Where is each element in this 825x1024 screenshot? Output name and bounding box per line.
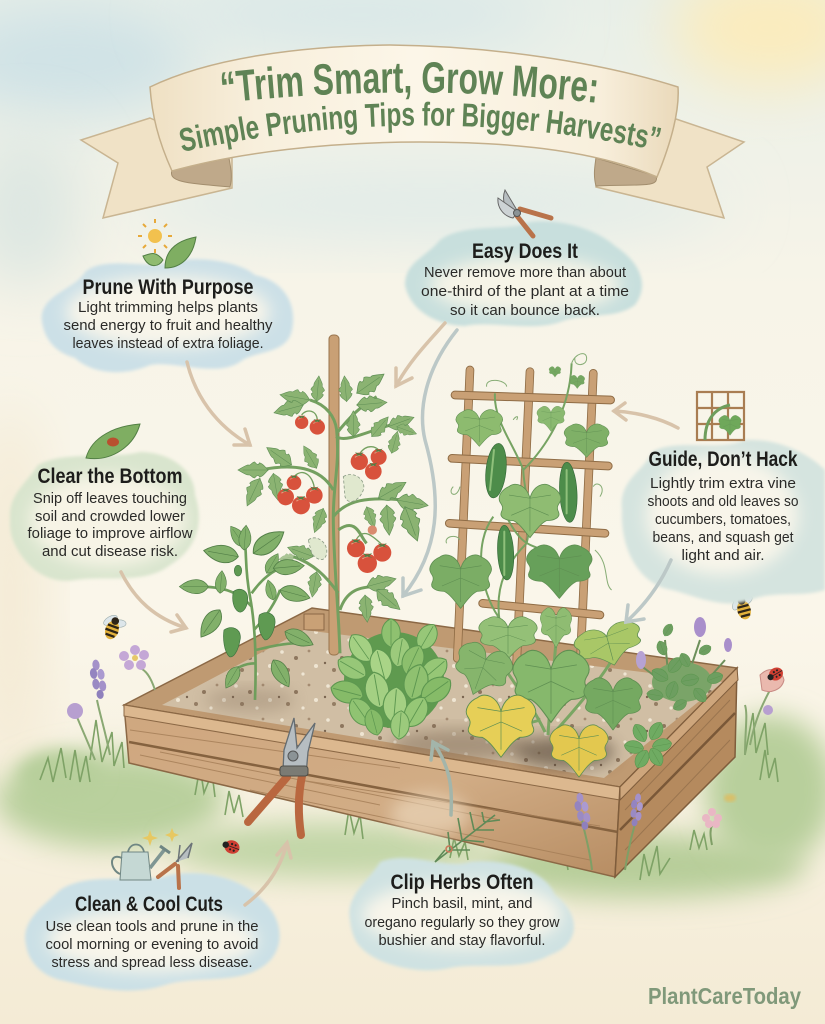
trellis <box>449 370 611 663</box>
callout: clip herbs often: Pinch basil, mint, and <box>392 895 532 912</box>
cucumber leaves in front <box>430 484 592 608</box>
peppers <box>224 565 275 657</box>
icon: leaf with bug <box>86 424 140 459</box>
logo: PlantCareToday <box>648 983 801 1009</box>
callout: easy does it: so it can bounce back. <box>450 302 600 319</box>
callout: prune with purpose: send energy to fruit and healthy <box>64 317 273 334</box>
callout: prune with purpose: Light trimming helps plants <box>78 299 258 316</box>
callout: prune with purpose: leaves instead of extra foliage. <box>72 335 264 352</box>
arrow: easy to tomato <box>396 323 445 386</box>
icon: trellis <box>697 392 744 440</box>
callout: guide dont hack: Guide, Don’t Hack <box>648 448 798 471</box>
callout: clear the bottom: foliage to improve airflow <box>28 525 193 542</box>
icon: herb sprig <box>435 812 500 862</box>
title: Simple Pruning Tips for Bigger Harvests” <box>180 102 662 151</box>
callout: clean and cool cuts <box>25 873 280 991</box>
callout: easy does it: Never remove more than about <box>424 264 627 281</box>
bee left <box>97 610 129 643</box>
callout: clip herbs often <box>349 858 574 970</box>
callout: clip herbs often: bushier and stay flavorful. <box>378 932 546 949</box>
bed front left face <box>124 705 620 877</box>
cucumbers <box>483 442 579 580</box>
bed soil <box>162 630 723 778</box>
callout: clean and cool cuts: stress and spread less disease. <box>52 954 252 971</box>
arrow: clear to pepper <box>121 572 186 632</box>
tomato stake <box>329 335 339 655</box>
banner right curl <box>594 158 656 186</box>
mint sprig <box>623 719 673 771</box>
callout: guide dont hack: beans, and squash get <box>652 529 794 546</box>
cucumber vine <box>430 354 612 623</box>
callout: prune with purpose <box>42 259 293 372</box>
foreground lavender <box>572 792 736 870</box>
callout: easy does it <box>405 221 642 326</box>
callout: clear the bottom: Clear the Bottom <box>38 465 182 488</box>
basil plant <box>328 619 457 740</box>
callout: clear the bottom: Snip off leaves touching <box>33 490 187 507</box>
arrow: clean to shears <box>245 843 291 905</box>
left flowers and lavender <box>67 645 155 760</box>
callout: clean and cool cuts: cool morning or evening to avoid <box>46 936 258 953</box>
title: “Trim Smart, Grow More: <box>222 62 597 102</box>
callout: clip herbs often: oregano regularly so they grow <box>364 914 560 931</box>
callout: prune with purpose: Prune With Purpose <box>82 276 254 299</box>
callout: guide dont hack: shoots and old leaves so <box>648 493 798 510</box>
banner main panel <box>150 45 678 177</box>
bed inner back walls <box>124 608 737 787</box>
callout: clean and cool cuts: Use clean tools and prune in the <box>46 918 258 935</box>
squash plant <box>447 608 673 777</box>
title <box>180 62 662 151</box>
pepper leaves <box>179 523 316 691</box>
icon: pruners top <box>498 190 551 236</box>
oregano herb <box>636 617 732 713</box>
bed corner post <box>304 614 324 630</box>
bee right <box>728 591 758 622</box>
arrow: easy long <box>403 330 457 596</box>
tomato clusters <box>277 411 391 573</box>
callout: easy does it: one-third of the plant at a time <box>421 283 629 300</box>
callout: clear the bottom: soil and crowded lower <box>35 508 185 525</box>
callout: guide dont hack: cucumbers, tomatoes, <box>655 511 791 528</box>
icon: watering can and pruners <box>112 828 192 888</box>
banner right tail <box>596 118 744 218</box>
callout: clip herbs often: Clip Herbs Often <box>390 871 534 894</box>
pruning shears large <box>248 718 315 835</box>
grass ground wash <box>0 713 825 898</box>
arrow: guide to trellis <box>614 403 678 428</box>
tomato plant <box>238 367 430 653</box>
arrow: prune to tomato <box>187 362 250 445</box>
pepper plant <box>179 523 316 700</box>
callout: guide dont hack <box>622 440 825 604</box>
purple flower <box>119 645 149 670</box>
callout: guide dont hack: light and air. <box>682 547 764 564</box>
callout: clean and cool cuts: Clean & Cool Cuts <box>75 893 223 916</box>
squash leaves <box>479 617 537 659</box>
banner left curl <box>171 158 231 187</box>
banner left tail <box>81 118 232 218</box>
callout: clear the bottom: and cut disease risk. <box>42 543 178 560</box>
right flowers <box>745 665 785 755</box>
ladybug small <box>220 837 241 856</box>
raised garden bed <box>124 608 738 877</box>
callout: clear the bottom <box>10 452 199 581</box>
tomato leaves <box>238 367 430 623</box>
arrow: clip to basil <box>431 742 451 815</box>
icon: sun and leaf <box>138 219 196 268</box>
arrow: guide to squash <box>626 560 671 622</box>
cucumber leaves behind fruit <box>456 367 609 457</box>
ladybug right <box>765 665 785 684</box>
dashed cut leaf outlines <box>308 474 364 560</box>
banner ribbon <box>81 45 744 218</box>
bed right face <box>615 668 737 877</box>
callout: easy does it: Easy Does It <box>472 240 578 263</box>
callout: guide dont hack: Lightly trim extra vine <box>650 475 796 492</box>
